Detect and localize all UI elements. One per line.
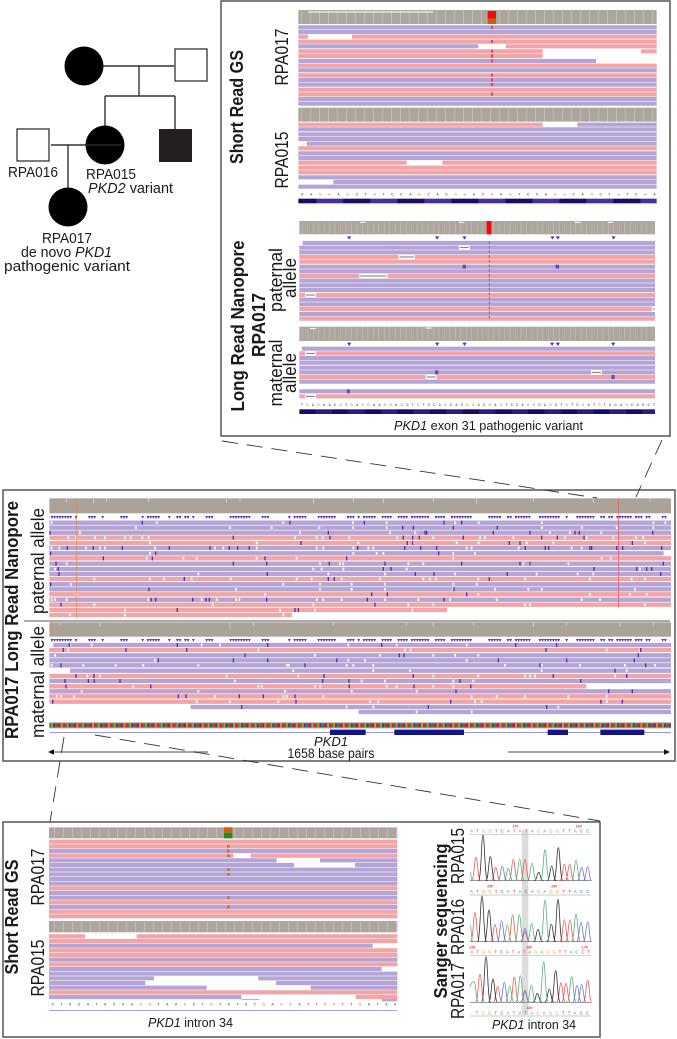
- caption: Sanger PKD1 intron 34: PKD1 intron 34: [492, 1018, 576, 1032]
- pedigree connecting lines: [51, 66, 175, 188]
- label: RPA015 PKD2 variant: PKD2 variant: [88, 181, 173, 197]
- label: Sanger RPA017: RPA017: [448, 963, 468, 1019]
- panel border: [3, 822, 600, 1037]
- heading: RPA017 Long Read Nanopore: RPA017 Long Read Nanopore: [2, 501, 22, 739]
- icon: RPA015 affected mother: [86, 126, 124, 164]
- chart: maternal allele long read pileup: [49, 622, 671, 713]
- chart: Sanger chromatograms: 170: [582, 945, 588, 949]
- label: RPA017 de novo PKD1 pathogenic variant: RPA017: [42, 231, 92, 247]
- icon: affected uncle: [159, 129, 192, 162]
- chart: short read RPA015 pileup: A A G G A G C T G T C C A G C A C G G A C G A G T C C A G G C A G C T G T C G A: [301, 193, 656, 197]
- chart: paternal allele long read pileup: [49, 498, 671, 618]
- divider between alleles: [24, 620, 670, 622]
- panel: RPA017 long read nanopore whole region: [2, 490, 675, 761]
- heading: Short Read GS: Short Read GS: [227, 50, 247, 164]
- chart: Sanger chromatograms: TGGTCATATAGAGGTTACC: [476, 1010, 589, 1015]
- zoom guide: dashed lines from long read panel to intron panel: [50, 735, 600, 822]
- arrow: left span: [48, 749, 208, 755]
- panel: intron 34 short read: [2, 822, 600, 1037]
- chart: short read RPA017 pileup: [298, 10, 657, 104]
- chart: Sanger chromatograms: 160: [526, 945, 532, 949]
- heading: RPA017: RPA017: [249, 293, 269, 357]
- chart: Sanger chromatograms: 150: [469, 945, 475, 949]
- caption: PKD1 intron 34: PKD1 intron 34: [148, 1016, 233, 1030]
- chart: intron short read RPA015 pileup: [49, 921, 397, 1010]
- caption: PKD1 exon 31 pathogenic variant: PKD1 exon 31 pathogenic variant: [394, 419, 584, 433]
- label: maternal allele: maternal allele: [28, 626, 48, 738]
- label: paternal allele: paternal allele: [28, 508, 48, 614]
- label: RPA015 PKD2 variant: [86, 167, 173, 197]
- panel border: [3, 490, 675, 761]
- label: RPA017: RPA017: [28, 848, 48, 906]
- arrow: right span: [508, 749, 670, 755]
- chart: long read maternal allele pileup: T G A G A A C G T G A G G A A G G A G C T G T C C A G C A C G G A C G A G T C C A G G C A G C T G T C G A T G T C C A G C A C C T: [301, 403, 655, 407]
- label: RPA015: RPA015: [28, 940, 48, 996]
- icon: RPA017 affected proband: [48, 188, 88, 226]
- label: paternal: paternal: [266, 248, 286, 312]
- label: maternal: maternal: [266, 340, 286, 406]
- icon: affected grandmother: [64, 46, 104, 86]
- chart: Sanger chromatograms: ATGGTCATACAGAGGTTACC: [470, 889, 589, 894]
- label: RPA017 de novo PKD1 pathogenic variant: de novo PKD1: [21, 245, 112, 261]
- chart: Sanger chromatograms: 150: [487, 885, 493, 889]
- chart: reference sequence colour track: [49, 722, 671, 728]
- label: Sanger RPA016: RPA016: [448, 899, 468, 955]
- chart: intron short read RPA015 pileup: C T A C A T A C A A G G T A A G C T G T A T A T G A G G A T T T G T T G A T A A: [52, 1002, 397, 1006]
- zoom guide: dashed lines from exon panel to long read panel: [222, 440, 662, 498]
- label: RPA017 short read: RPA017: [272, 28, 292, 86]
- chart: Sanger chromatograms: ATGGTCATATAGAGGTTACCT: [471, 950, 590, 955]
- label: maternal second line: allele: [280, 353, 300, 393]
- label: RPA015 short read: RPA015: [272, 132, 292, 188]
- chart: long read paternal allele pileup: [299, 221, 655, 320]
- chart: long read maternal allele pileup: [299, 327, 655, 414]
- icon: unaffected grandfather: [175, 49, 207, 81]
- heading: Long Read Nanopore: Long Read Nanopore: [228, 240, 248, 412]
- chart: short read RPA015 pileup: [298, 108, 657, 203]
- panel: exon 31 short read and long read: [221, 1, 670, 436]
- label: paternal second line: allele: [280, 258, 300, 298]
- chart: Sanger chromatograms: ATGGTCATATAGAGGTTACC: [470, 828, 589, 833]
- label: Sanger RPA015: RPA015: [448, 828, 468, 884]
- icon: RPA016 unaffected father: [17, 129, 49, 161]
- mother connecting line overlay: [86, 144, 121, 146]
- chart: intron short read RPA017 pileup: [49, 827, 397, 916]
- chart: Sanger chromatograms: 160: [551, 885, 557, 889]
- label: PKD1 gene: PKD1: [314, 734, 348, 749]
- chart: Sanger chromatograms: 180: [576, 825, 582, 829]
- pedigree: [4, 46, 207, 275]
- label: RPA017 de novo PKD1 pathogenic variant: [4, 231, 130, 275]
- heading: Short Read GS: Short Read GS: [2, 860, 22, 974]
- label: RPA015 PKD2 variant: RPA015: [86, 167, 136, 183]
- chart: Sanger chromatograms: 180: [526, 1006, 532, 1010]
- chart: PKD1 gene model with exons: [49, 730, 671, 735]
- chart: Sanger chromatograms: 170: [512, 825, 518, 829]
- label: RPA016: RPA016: [8, 165, 58, 181]
- heading: Sanger sequencing: Sanger sequencing: [431, 844, 451, 998]
- label: 1658 base pairs: 1658 base pairs: [288, 746, 375, 761]
- label: RPA017 de novo PKD1 pathogenic variant: pathogenic variant: [4, 259, 130, 275]
- chart: Sanger chromatograms: [469, 825, 592, 1016]
- panel border: [221, 1, 670, 436]
